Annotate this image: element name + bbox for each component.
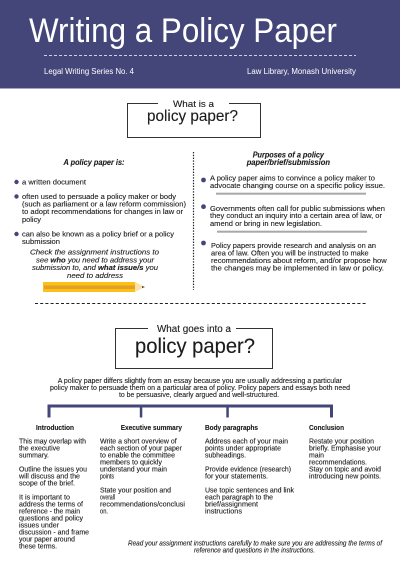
bullet: also known as: submission xyxy=(22,237,60,246)
heading box: what is a policy paper xyxy=(128,99,260,138)
right heading xyxy=(246,150,330,167)
column: conclusion: main xyxy=(309,450,324,460)
heading box: what is a policy paper: policy paper? xyxy=(147,108,238,125)
column: executive summary: on. xyxy=(100,506,108,516)
column: introduction: reference - the main xyxy=(19,506,80,516)
heading box: what goes into a policy paper: What goes into a xyxy=(157,324,231,335)
column: executive summary: members to quickly xyxy=(100,458,162,466)
column: conclusion: recommendations. xyxy=(309,458,367,466)
bullet: written document: a written document xyxy=(22,178,87,186)
column: executive summary: each section of your paper xyxy=(100,444,182,452)
column: executive summary: overall xyxy=(100,492,115,502)
bullet: also known as: can also be known as a policy brief or a policy xyxy=(22,230,174,238)
bullet: used to persuade: policy xyxy=(22,215,41,224)
library label: Law Library, Monash University xyxy=(247,67,356,76)
title: Writing a Policy Paper xyxy=(29,12,337,50)
bullet: research: area of law. Often you will be instructed to make xyxy=(211,248,369,258)
intro paragraph: policy maker to persuade them on a particular area of policy. Policy papers and essays both need xyxy=(50,383,350,392)
footer note: reference and questions in the instructions. xyxy=(194,546,315,554)
right heading: paper/brief/submission xyxy=(246,158,330,167)
footer note xyxy=(128,538,383,554)
bullet: submissions: they conduct an inquiry into a certain area of law, or xyxy=(210,211,382,220)
italic note: Check the assignment instructions to xyxy=(30,248,159,256)
bullet: submissions: Governments often call for public submissions when xyxy=(210,204,385,213)
bullet: aims xyxy=(201,174,385,190)
column: introduction: issues under xyxy=(19,520,59,530)
heading box: what goes into a policy paper: policy paper? xyxy=(135,335,255,358)
column: executive summary: understand your main xyxy=(100,464,167,474)
column: introduction: It is important to xyxy=(19,492,70,502)
italic note: see who you need to address your xyxy=(36,256,154,264)
column: executive summary: State your position and xyxy=(100,486,171,494)
column: body paragraphs: subheadings. xyxy=(205,450,246,460)
column: introduction: Introduction xyxy=(36,423,74,432)
header banner xyxy=(0,0,400,89)
column: introduction: will discuss and the xyxy=(18,472,80,480)
series label: Legal Writing Series No. 4 xyxy=(44,67,135,76)
column: introduction: summary. xyxy=(19,450,49,460)
intro paragraph: to be persuasive, clearly argued and well-structured. xyxy=(119,390,279,399)
icon: pencil xyxy=(43,282,145,292)
bullet: submissions xyxy=(201,204,385,228)
panel: a policy paper is xyxy=(14,158,186,292)
column: executive summary xyxy=(100,423,185,516)
column: introduction xyxy=(18,423,89,550)
column: conclusion: Conclusion xyxy=(309,423,344,432)
column: body paragraphs: for your statements. xyxy=(205,472,268,480)
column: introduction: your paper around xyxy=(19,534,75,544)
bullet: aims: advocate changing course on a specific policy issue. xyxy=(210,181,385,190)
column: conclusion: Restate your position xyxy=(309,436,374,446)
bullet: research: recommendations about reform, and/or propose how xyxy=(211,256,387,265)
bullet: used to persuade xyxy=(14,192,186,224)
column: conclusion: introducing new points. xyxy=(309,472,381,480)
italic note: submission to, and what issue/s you xyxy=(32,263,159,272)
column: body paragraphs: points under appropriate xyxy=(205,444,281,452)
bullet: used to persuade: often used to persuade a policy maker or body xyxy=(22,192,176,201)
bullet: research: Policy papers provide research and analysis on an xyxy=(211,241,376,250)
column: introduction: discussion - and frame xyxy=(19,528,89,536)
right heading: Purposes of a policy xyxy=(253,150,324,160)
column: introduction: the executive xyxy=(19,444,60,452)
column: body paragraphs: brief/assignment xyxy=(205,500,259,508)
bullet: used to persuade: (such as parliament or a law reform commission) xyxy=(22,200,186,208)
column: conclusion xyxy=(309,423,381,480)
bullet: submissions: amend or bring in new legislation. xyxy=(210,219,322,228)
column: conclusion: Stay on topic and avoid xyxy=(309,464,381,474)
column: introduction: questions and policy xyxy=(19,514,83,522)
bullet: aims: A policy paper aims to convince a policy maker to xyxy=(210,174,375,182)
column: body paragraphs: Use topic sentences and link xyxy=(205,486,294,494)
column: body paragraphs: Provide evidence (research) xyxy=(205,464,291,474)
column: body paragraphs: each paragraph to the xyxy=(205,492,273,502)
bracket connector xyxy=(48,404,333,418)
italic note xyxy=(30,248,159,280)
column: body paragraphs: Address each of your main xyxy=(205,436,288,446)
bullet: also known as xyxy=(14,230,174,246)
column: introduction: This may overlap with xyxy=(19,436,86,446)
column: executive summary: Executive summary xyxy=(121,423,183,432)
intro paragraph xyxy=(50,376,350,399)
heading box: what goes into a policy paper xyxy=(116,324,272,368)
column: body paragraphs: Body paragraphs xyxy=(205,423,258,432)
panel: purposes xyxy=(201,150,387,272)
column: introduction: address the terms of xyxy=(19,500,84,508)
column: conclusion: briefly. Emphasise your xyxy=(309,444,381,452)
bullet: used to persuade: to adopt recommendations for changes in law or xyxy=(22,207,183,216)
left heading: A policy paper is: xyxy=(63,158,125,167)
column: executive summary: Write a short overview of xyxy=(100,436,178,446)
column: executive summary: recommendations/conclusi xyxy=(100,500,185,508)
column: body paragraphs xyxy=(205,423,294,516)
column: introduction: these terms. xyxy=(19,542,57,550)
intro paragraph: A policy paper differs slightly from an essay because you are usually addressing a particular xyxy=(58,376,342,385)
bullet: research xyxy=(201,241,387,272)
bullet: research: the changes may be implemented in law or policy. xyxy=(211,264,384,272)
column: introduction: Outline the issues you xyxy=(19,464,87,474)
column: body paragraphs: instructions xyxy=(205,506,242,516)
column: executive summary: to enable the committee xyxy=(100,450,175,460)
column: executive summary: points xyxy=(100,472,114,480)
heading box: what is a policy paper: What is a xyxy=(173,99,214,109)
italic note: need to address xyxy=(67,271,123,280)
column: introduction: scope of the brief. xyxy=(19,478,75,488)
